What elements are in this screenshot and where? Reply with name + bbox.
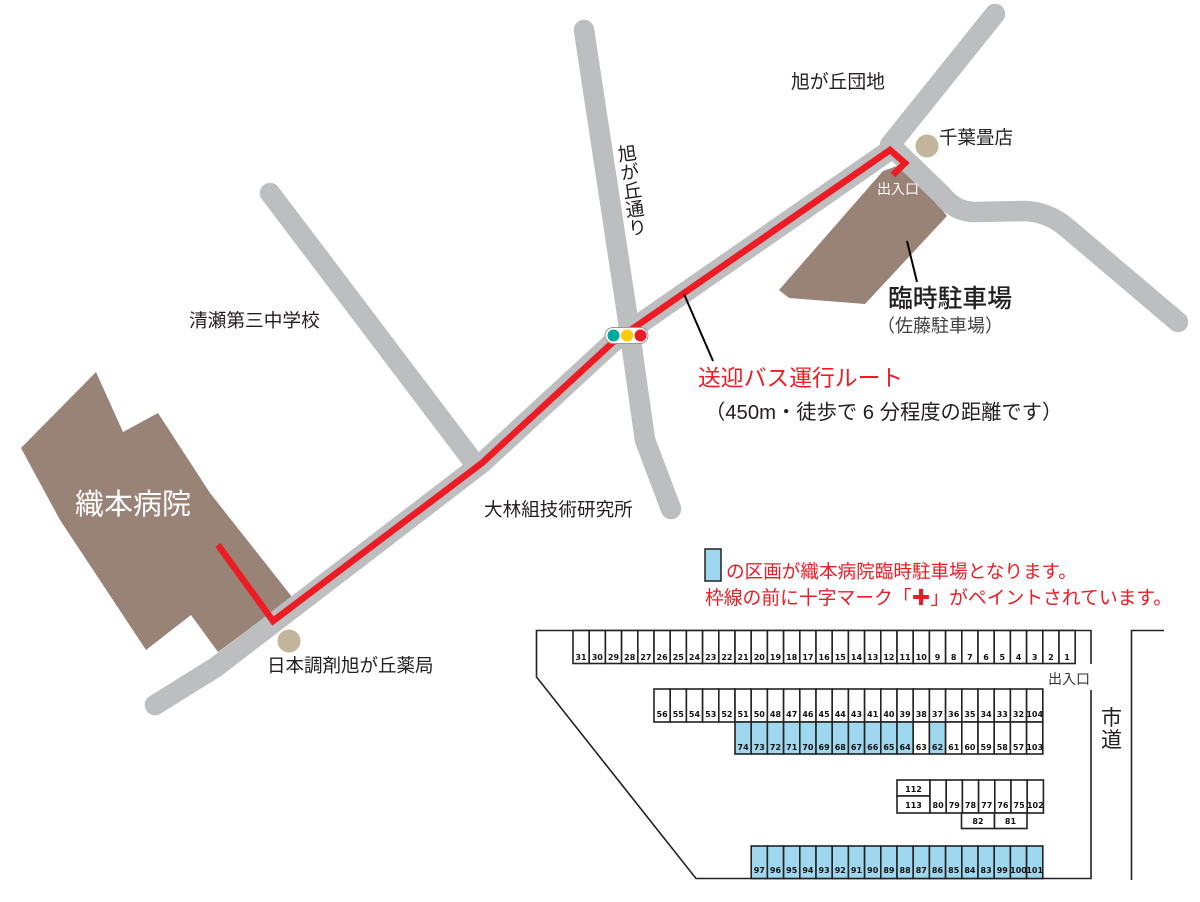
stall row: 97 to 101: 83 xyxy=(981,866,992,875)
parking lot map xyxy=(536,630,1164,880)
stall row: 56 to 104: 53 xyxy=(705,710,716,719)
stall row: 74 to 103: 70 xyxy=(802,743,814,752)
stall row: 74 to 103: 57 xyxy=(1013,743,1024,752)
stall row: 56 to 104: 43 xyxy=(851,710,862,719)
stall row: 31 to 1: 12 xyxy=(883,653,894,662)
stall row: 74 to 103: 67 xyxy=(851,743,862,752)
pointer: bus route xyxy=(684,294,713,361)
stall row: 31 to 1: 22 xyxy=(721,653,732,662)
label: research institute: 大林組技術研究所 xyxy=(484,499,633,520)
stall row: 97 to 101: 96 xyxy=(770,866,781,875)
stall row: 31 to 1: 29 xyxy=(608,653,619,662)
stall row: 74 to 103 xyxy=(735,722,1043,754)
stall row: 31 to 1: 7 xyxy=(967,653,973,662)
stall block: 112 to 102 and 82, 81: 80 xyxy=(933,801,944,810)
stall row: 97 to 101: 97 xyxy=(754,866,765,875)
stall row: 31 to 1: 31 xyxy=(575,653,587,662)
legend line one: の区画が織本病院臨時駐車場となります。 xyxy=(726,561,1077,582)
hospital label: 織本病院 xyxy=(75,488,191,521)
stall row: 31 to 1: 19 xyxy=(770,653,781,662)
stall block: 112 to 102 and 82, 81: 82 xyxy=(972,817,984,826)
stall block: 112 to 102 and 82, 81: 79 xyxy=(949,801,960,810)
stall row: 56 to 104: 44 xyxy=(835,710,846,719)
stall row: 31 to 1: 3 xyxy=(1032,653,1037,662)
stall row: 56 to 104: 45 xyxy=(819,710,830,719)
stall row: 56 to 104: 39 xyxy=(900,710,911,719)
stall row: 74 to 103: 60 xyxy=(964,743,976,752)
stall row: 56 to 104: 32 xyxy=(1013,710,1024,719)
stall row: 56 to 104: 34 xyxy=(981,710,992,719)
stall row: 56 to 104: 35 xyxy=(964,710,976,719)
stall row: 74 to 103: 72 xyxy=(770,743,781,752)
stall row: 31 to 1: 20 xyxy=(754,653,765,662)
stall row: 74 to 103: 66 xyxy=(867,743,879,752)
stall row: 56 to 104: 38 xyxy=(916,710,927,719)
stall row: 74 to 103: 68 xyxy=(835,743,846,752)
stall row: 56 to 104: 50 xyxy=(754,710,765,719)
traffic light xyxy=(605,328,648,344)
stall block: 112 to 102 and 82, 81: 77 xyxy=(981,801,992,810)
stall row: 97 to 101: 94 xyxy=(802,866,814,875)
stall block: 112 to 102 and 82, 81: 78 xyxy=(965,801,976,810)
stall row: 31 to 1: 4 xyxy=(1016,653,1022,662)
temporary parking lot area xyxy=(779,163,947,304)
stall row: 31 to 1: 16 xyxy=(819,653,830,662)
stall row: 56 to 104 xyxy=(654,689,1043,722)
stall row: 74 to 103: 103 xyxy=(1026,743,1043,752)
stall row: 56 to 104: 56 xyxy=(657,710,668,719)
landmark dot: Chiba tatami shop xyxy=(916,134,938,158)
stall row: 74 to 103: 69 xyxy=(819,743,830,752)
stall row: 74 to 103: 61 xyxy=(948,743,960,752)
stall row: 97 to 101: 85 xyxy=(948,866,960,875)
stall row: 31 to 1: 30 xyxy=(592,653,603,662)
stall block: 112 to 102 and 82, 81: 75 xyxy=(1014,801,1025,810)
label: Chiba tatami shop: 千葉畳店 xyxy=(939,127,1013,148)
lot entrance label: 出入口 xyxy=(1048,671,1090,687)
stall row: 97 to 101: 91 xyxy=(851,866,862,875)
stall row: 31 to 1: 21 xyxy=(738,653,749,662)
stall row: 31 to 1: 9 xyxy=(935,653,941,662)
public road line xyxy=(1132,630,1164,880)
city road label lower: 道 xyxy=(1101,729,1122,752)
stall row: 97 to 101 xyxy=(751,846,1043,878)
stall row: 74 to 103: 74 xyxy=(738,743,749,752)
stall row: 74 to 103: 71 xyxy=(786,743,798,752)
city road label: 市 xyxy=(1101,707,1122,730)
stall row: 56 to 104: 41 xyxy=(867,710,879,719)
stall row: 31 to 1: 6 xyxy=(983,653,989,662)
road network xyxy=(155,14,1178,705)
stall block: 112 to 102 and 82, 81: 113 xyxy=(905,801,922,810)
stall row: 31 to 1: 10 xyxy=(916,653,927,662)
stall row: 97 to 101: 93 xyxy=(819,866,830,875)
stall block: 112 to 102 and 82, 81 xyxy=(897,780,1044,828)
stall row: 31 to 1: 23 xyxy=(705,653,716,662)
parking entrance label: 出入口 xyxy=(877,181,919,197)
stall row: 31 to 1: 24 xyxy=(689,653,700,662)
stall row: 31 to 1: 13 xyxy=(867,653,878,662)
legend line two: 枠線の前に十字マーク「✚」がペイントされています。 xyxy=(705,587,1172,608)
stall row: 74 to 103: 59 xyxy=(981,743,992,752)
stall row: 97 to 101: 99 xyxy=(997,866,1008,875)
stall row: 56 to 104: 36 xyxy=(948,710,960,719)
stall row: 97 to 101: 100 xyxy=(1010,866,1027,875)
stall row: 56 to 104: 104 xyxy=(1026,710,1043,719)
stall row: 31 to 1: 1 xyxy=(1064,653,1070,662)
pointer: parking lot xyxy=(907,241,917,282)
stall row: 56 to 104: 51 xyxy=(738,710,749,719)
label: pharmacy: 日本調剤旭が丘薬局 xyxy=(267,655,434,676)
label: Asahigaoka street: 旭が丘通り xyxy=(615,143,648,238)
subheading: Sato parking: （佐藤駐車場） xyxy=(877,316,1003,336)
lot outline xyxy=(536,630,1091,878)
stall row: 56 to 104: 37 xyxy=(932,710,943,719)
stall row: 97 to 101: 101 xyxy=(1026,866,1043,875)
red bus route xyxy=(218,150,905,621)
stall row: 31 to 1: 11 xyxy=(900,653,911,662)
stall row: 97 to 101: 87 xyxy=(916,866,927,875)
stall block: 112 to 102 and 82, 81: 81 xyxy=(1005,817,1016,826)
stall row: 74 to 103: 62 xyxy=(932,743,943,752)
stall row: 31 to 1: 15 xyxy=(835,653,846,662)
stall row: 97 to 101: 84 xyxy=(964,866,976,875)
stall row: 97 to 101: 95 xyxy=(786,866,798,875)
stall row: 56 to 104: 33 xyxy=(997,710,1008,719)
stall row: 31 to 1: 28 xyxy=(624,653,636,662)
stall row: 97 to 101: 90 xyxy=(867,866,879,875)
stall row: 31 to 1: 18 xyxy=(786,653,798,662)
stall row: 56 to 104: 55 xyxy=(673,710,684,719)
stall block: 112 to 102 and 82, 81: 112 xyxy=(905,785,922,794)
stall row: 74 to 103: 73 xyxy=(754,743,765,752)
stall row: 74 to 103: 65 xyxy=(883,743,895,752)
stall row: 74 to 103: 58 xyxy=(997,743,1008,752)
label: Asahigaoka housing: 旭が丘団地 xyxy=(791,71,885,92)
stall row: 31 to 1: 17 xyxy=(802,653,813,662)
stall row: 97 to 101: 88 xyxy=(900,866,911,875)
heading: temporary parking: 臨時駐車場 xyxy=(888,285,1012,313)
stall row: 74 to 103: 64 xyxy=(900,743,911,752)
stall block: 112 to 102 and 82, 81: 76 xyxy=(997,801,1009,810)
stall row: 31 to 1: 26 xyxy=(657,653,668,662)
stall row: 31 to 1: 5 xyxy=(1000,653,1006,662)
stall row: 56 to 104: 48 xyxy=(770,710,781,719)
stall row: 31 to 1: 25 xyxy=(673,653,684,662)
stall row: 56 to 104: 54 xyxy=(689,710,700,719)
stall row: 56 to 104: 40 xyxy=(883,710,895,719)
stall row: 31 to 1: 27 xyxy=(640,653,651,662)
stall row: 97 to 101: 89 xyxy=(883,866,895,875)
label: school: 清瀬第三中学校 xyxy=(189,310,320,331)
stall row: 31 to 1 xyxy=(573,630,1075,664)
stall row: 56 to 104: 52 xyxy=(721,710,732,719)
stall row: 74 to 103: 63 xyxy=(916,743,927,752)
legend swatch xyxy=(705,549,721,581)
stall row: 56 to 104: 47 xyxy=(786,710,797,719)
stall row: 97 to 101: 92 xyxy=(835,866,846,875)
stall row: 56 to 104: 46 xyxy=(802,710,814,719)
heading: bus route: 送迎バス運行ルート xyxy=(698,365,903,391)
stall row: 31 to 1: 14 xyxy=(851,653,862,662)
stall row: 31 to 1: 8 xyxy=(951,653,957,662)
hospital building xyxy=(21,372,292,652)
stall row: 97 to 101: 86 xyxy=(932,866,943,875)
route distance note: （450m・徒歩で 6 分程度の距離です） xyxy=(705,401,1062,424)
stall block: 112 to 102 and 82, 81: 102 xyxy=(1027,801,1044,810)
stall row: 31 to 1: 2 xyxy=(1048,653,1054,662)
landmark dot: pharmacy xyxy=(278,630,300,652)
